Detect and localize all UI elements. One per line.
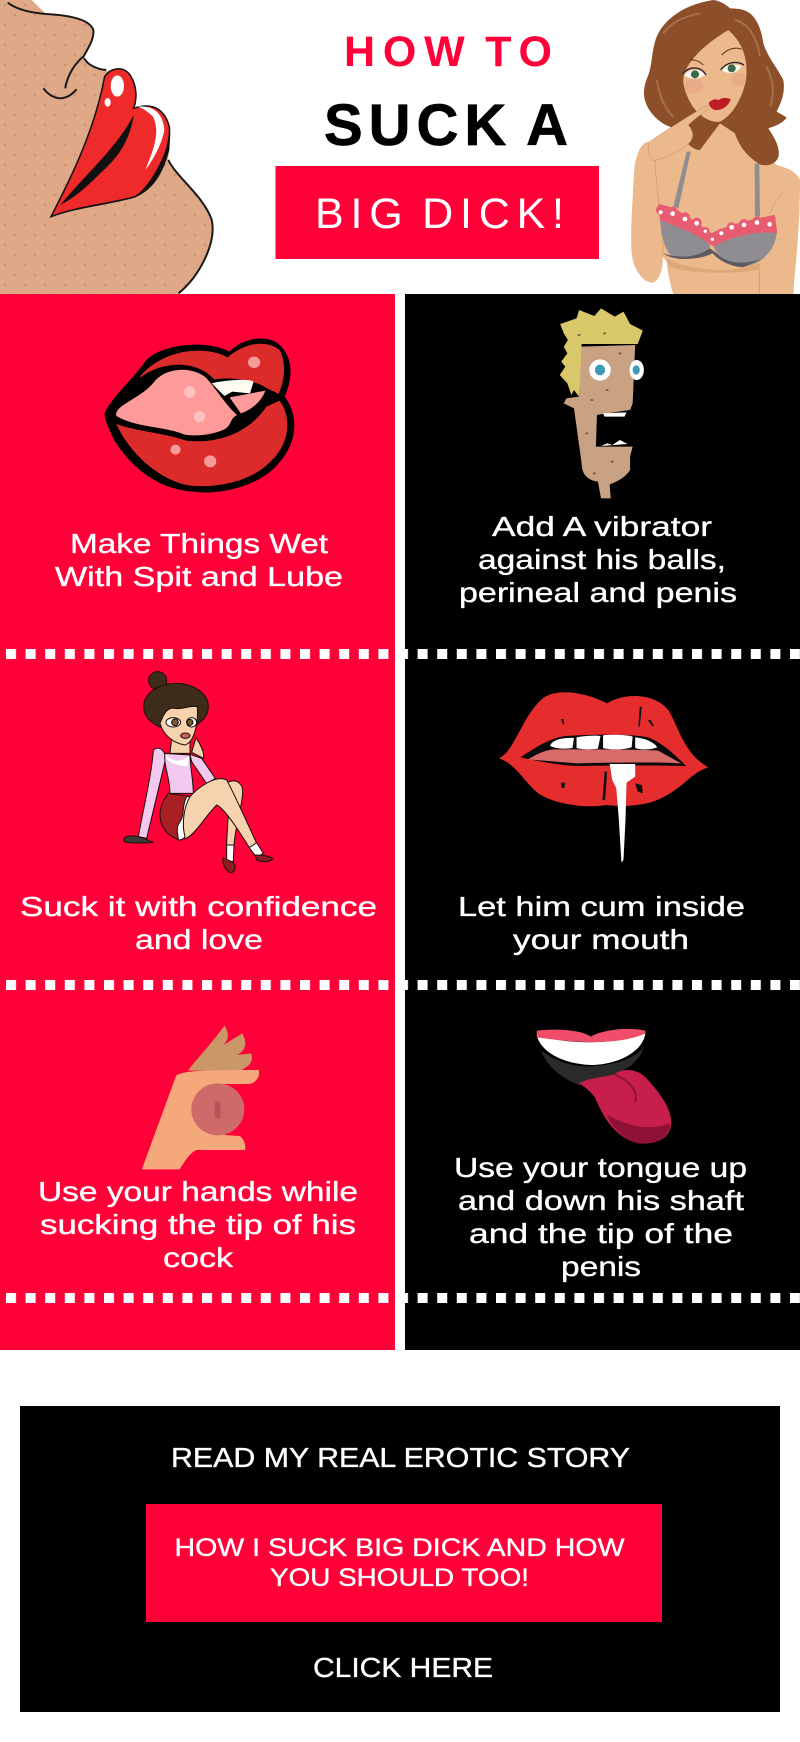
illustration: woman with finger on lips bbox=[631, 0, 800, 294]
text: step wet bbox=[55, 528, 343, 592]
text: step tongue: Use your tongue up bbox=[454, 1152, 747, 1183]
text: step vibrator: perineal and penis bbox=[459, 577, 737, 608]
text: step tongue bbox=[454, 1152, 747, 1282]
text: step mouth bbox=[458, 891, 745, 955]
text: step tongue: and the tip of the bbox=[469, 1218, 733, 1249]
panel: black column bbox=[405, 294, 800, 1350]
text: step tongue: penis bbox=[561, 1251, 641, 1282]
text: step hands: sucking the tip of his bbox=[40, 1209, 356, 1240]
text: step wet: With Spit and Lube bbox=[55, 561, 343, 592]
text: step tongue: and down his shaft bbox=[458, 1185, 744, 1216]
panel: call to action bbox=[20, 1406, 780, 1712]
title: how to: HOW TO bbox=[344, 28, 552, 76]
title banner: big dick: BIG DICK! bbox=[315, 190, 564, 238]
text: step wet: Make Things Wet bbox=[70, 528, 328, 559]
text: step hands: Use your hands while bbox=[38, 1176, 358, 1207]
icon: hand gripping bbox=[142, 1026, 259, 1169]
text: step hands bbox=[38, 1176, 358, 1273]
button: story title bbox=[146, 1504, 662, 1622]
button: story title: HOW I SUCK BIG DICK AND HOW bbox=[174, 1534, 625, 1562]
button: story title: YOU SHOULD TOO! bbox=[270, 1564, 529, 1592]
icon: red lips with drip bbox=[499, 692, 708, 863]
text: step vibrator bbox=[459, 511, 737, 608]
text: step confidence: and love bbox=[135, 924, 263, 955]
text: step vibrator: against his balls, bbox=[478, 544, 726, 575]
icon: shocked blond man bbox=[560, 308, 644, 498]
title: suck a: SUCK A bbox=[324, 93, 568, 158]
link: click here: CLICK HERE bbox=[313, 1652, 493, 1683]
icon: licking lips bbox=[105, 338, 294, 492]
panel: red column bbox=[0, 294, 395, 1350]
icon: seated cartoon woman bbox=[124, 672, 273, 873]
text: step mouth: your mouth bbox=[513, 924, 689, 955]
title banner: big dick bbox=[276, 166, 599, 259]
text: step mouth: Let him cum inside bbox=[458, 891, 745, 922]
icon: open mouth with tongue bbox=[537, 1029, 671, 1144]
text: step vibrator: Add A vibrator bbox=[492, 511, 712, 542]
text: step confidence: Suck it with confidence bbox=[20, 891, 377, 922]
text: step confidence bbox=[20, 891, 377, 955]
heading: read my real erotic story: READ MY REAL EROTIC STORY bbox=[171, 1442, 630, 1473]
text: step hands: cock bbox=[163, 1242, 234, 1273]
illustration: face in profile with red lips bbox=[0, 0, 213, 294]
